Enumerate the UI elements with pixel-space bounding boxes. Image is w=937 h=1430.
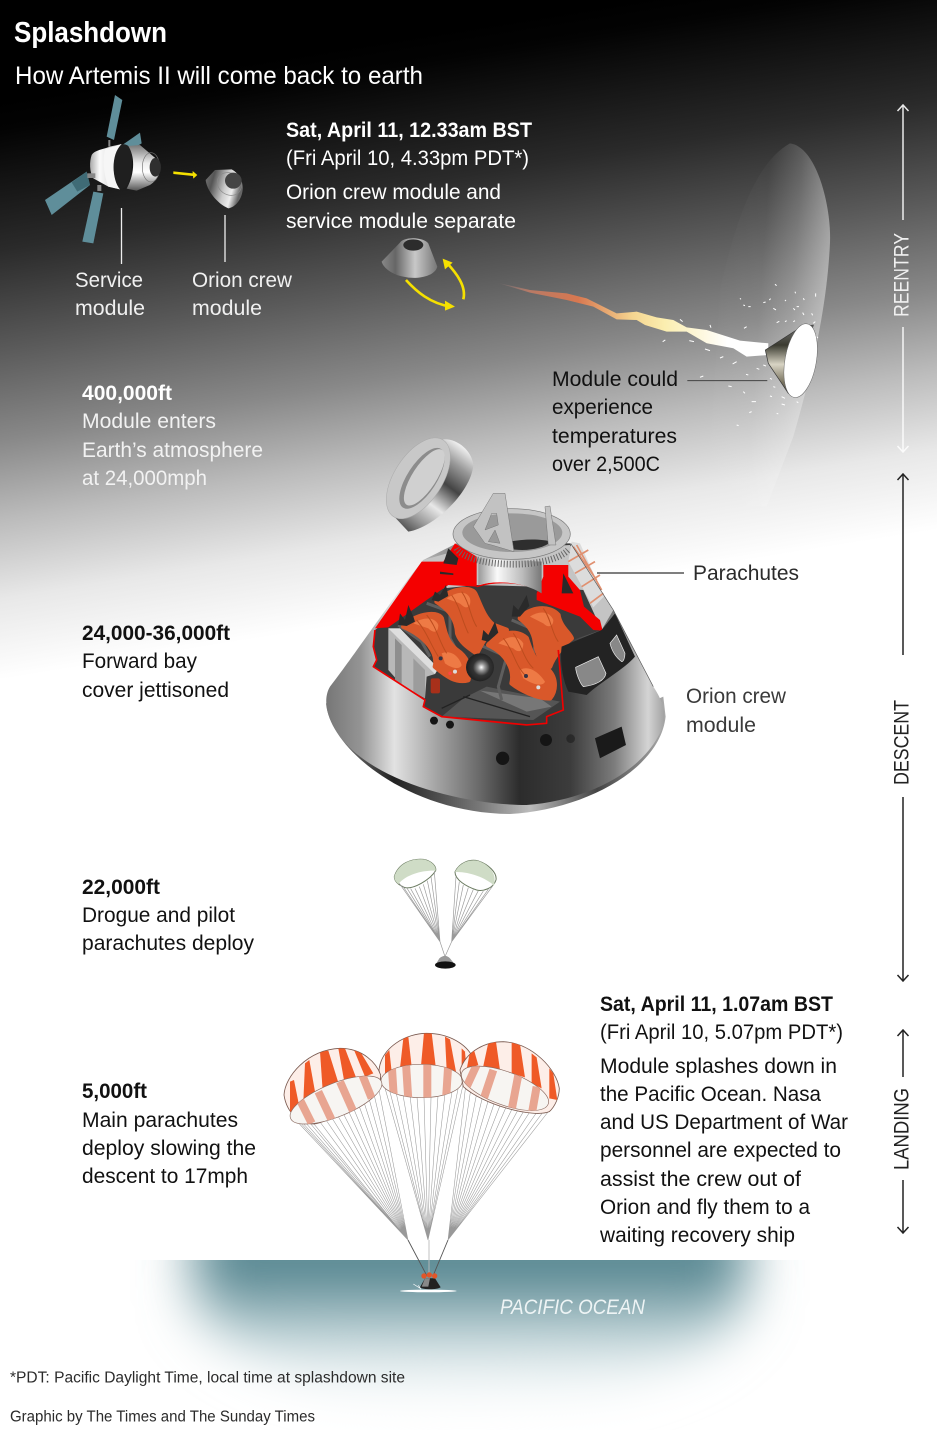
text: temperatures: Module could <box>552 367 678 391</box>
text: temperatures: over 2,500C <box>552 452 660 476</box>
text: main parachutes: Main parachutes <box>82 1108 238 1132</box>
icon: crew module turning with yellow arrows <box>382 238 464 311</box>
label: landing: LANDING <box>890 1088 914 1170</box>
left canopy <box>284 1048 382 1124</box>
text: drogue: Drogue and pilot <box>82 903 235 927</box>
illustration: ocean <box>153 1260 787 1398</box>
floor and seat base <box>442 687 560 720</box>
left canopy <box>394 859 436 888</box>
label: service module: module <box>75 296 145 320</box>
arrow: descent <box>898 474 908 981</box>
neck cylinder <box>478 558 542 593</box>
text: temperatures <box>552 367 678 476</box>
credit: Graphic by The Times and The Sunday Times <box>10 1408 315 1426</box>
thruster dots <box>430 717 575 765</box>
text: splashdown: Sat, April 11, 1.07am BST <box>600 992 833 1016</box>
text: splashdown: (Fri April 10, 5.07pm PDT*) <box>600 1020 843 1044</box>
fuel sphere <box>466 653 494 681</box>
subtitle: How Artemis II will come back to earth <box>15 62 423 90</box>
suit highlights <box>413 593 553 685</box>
label: service module: Service <box>75 268 143 292</box>
title: Splashdown <box>14 17 167 49</box>
red cut edge on interior <box>373 630 563 725</box>
icon: separated crew module <box>206 168 246 208</box>
text: 400,000ft <box>82 381 263 490</box>
crew cone <box>127 145 160 191</box>
forward bay cover ring <box>373 427 473 532</box>
crew cabin interior <box>388 585 572 720</box>
illustration: service module with crew module <box>45 95 161 243</box>
illustration: orion crew module cutaway <box>326 427 666 814</box>
illustration: main parachutes <box>284 1033 559 1292</box>
label: parachutes: Parachutes <box>693 561 799 585</box>
suspension lines <box>399 872 493 957</box>
text: separation time: service module separate <box>286 209 516 233</box>
text: main parachutes <box>82 1079 256 1188</box>
suit folds <box>417 592 558 675</box>
stowed parachutes <box>568 542 604 607</box>
text: temperatures: experience <box>552 395 653 419</box>
dark cut-outs in red <box>440 548 573 593</box>
text: drogue <box>82 875 254 955</box>
text: 400,000ft: 400,000ft <box>82 381 172 405</box>
cutaway interior <box>373 585 602 725</box>
label: service module <box>75 268 145 320</box>
text: forward bay: Forward bay <box>82 649 197 673</box>
text: separation time <box>286 118 532 233</box>
text: main parachutes: descent to 17mph <box>82 1164 248 1188</box>
text: splashdown: and US Department of War <box>600 1110 848 1134</box>
text: forward bay: 24,000-36,000ft <box>82 621 230 645</box>
label: pacific ocean: PACIFIC OCEAN <box>500 1296 646 1319</box>
extinguisher <box>431 678 440 693</box>
text: drogue: 22,000ft <box>82 875 160 899</box>
text: separation time: Orion crew module and <box>286 180 501 204</box>
small capsule <box>436 956 454 967</box>
body right edge <box>571 543 653 687</box>
reentry glow halo <box>707 143 830 507</box>
text: main parachutes: deploy slowing the <box>82 1136 256 1160</box>
text: splashdown: the Pacific Ocean. Nasa <box>600 1082 821 1106</box>
top of body <box>375 545 613 630</box>
helmet fins <box>398 585 529 642</box>
text: main parachutes: 5,000ft <box>82 1079 147 1103</box>
interior wall <box>388 628 438 698</box>
text: splashdown: personnel are expected to <box>600 1138 841 1162</box>
text: 400,000ft: Module enters <box>82 409 216 433</box>
text: 400,000ft: Earth’s atmosphere <box>82 438 263 462</box>
label: orion crew module (top) <box>192 268 292 320</box>
text: separation time: Sat, April 11, 12.33am BST <box>286 118 532 142</box>
arrow: landing <box>898 1030 908 1233</box>
text: forward bay <box>82 621 230 702</box>
module body <box>90 144 122 189</box>
astronauts in orange suits <box>403 589 572 698</box>
leader line: parachutes <box>597 572 684 574</box>
text: splashdown: assist the crew out of <box>600 1167 801 1191</box>
middle canopy <box>379 1033 472 1100</box>
text: forward bay: cover jettisoned <box>82 678 229 702</box>
text: splashdown: Module splashes down in <box>600 1054 837 1078</box>
sparks <box>663 284 818 426</box>
right canopy <box>455 860 496 890</box>
label: orion crew module (top): Orion crew <box>192 268 292 292</box>
text: temperatures: temperatures <box>552 424 677 448</box>
window panel <box>561 613 635 695</box>
label: orion crew module: module <box>686 713 756 737</box>
leader lines for modules <box>122 208 225 264</box>
label: orion crew module: Orion crew <box>686 684 786 708</box>
flame trail <box>497 283 768 357</box>
footnote: *PDT: Pacific Daylight Time, local time at splashdown site <box>10 1370 405 1386</box>
docking ring <box>453 509 570 559</box>
hatch <box>595 727 626 758</box>
label: reentry: REENTRY <box>890 233 914 317</box>
suit badges <box>439 656 540 689</box>
right canopy <box>456 1042 559 1120</box>
label: descent: DESCENT <box>890 700 914 785</box>
suspension lines: main parachutes <box>293 1081 548 1276</box>
text: splashdown <box>599 992 848 1247</box>
illustration: module reentry with flames <box>497 283 823 426</box>
text: splashdown: waiting recovery ship <box>599 1223 795 1247</box>
leader line <box>687 379 767 382</box>
text: drogue: parachutes deploy <box>82 931 254 955</box>
red insulation panels <box>375 543 603 631</box>
capsule <box>765 325 813 397</box>
dome top edge of interior <box>477 583 540 590</box>
arrow: reentry <box>898 105 908 452</box>
solar panels <box>45 95 142 243</box>
arrow: module separates <box>173 171 197 179</box>
label: orion crew module (top): module <box>192 296 262 320</box>
capsule body <box>326 543 665 805</box>
parachute support struts <box>473 493 556 552</box>
heat shield lip <box>326 697 666 814</box>
windows <box>576 635 625 687</box>
label: orion crew module <box>686 684 786 737</box>
text: separation time: (Fri April 10, 4.33pm PDT*) <box>286 146 529 170</box>
seat frames <box>398 603 538 700</box>
illustration: drogue and pilot parachutes <box>394 859 496 969</box>
text: splashdown: Orion and fly them to a <box>600 1195 810 1219</box>
text: 400,000ft: at 24,000mph <box>82 466 207 490</box>
splashed-down capsule <box>400 1272 457 1292</box>
docking ring teeth <box>457 548 568 564</box>
